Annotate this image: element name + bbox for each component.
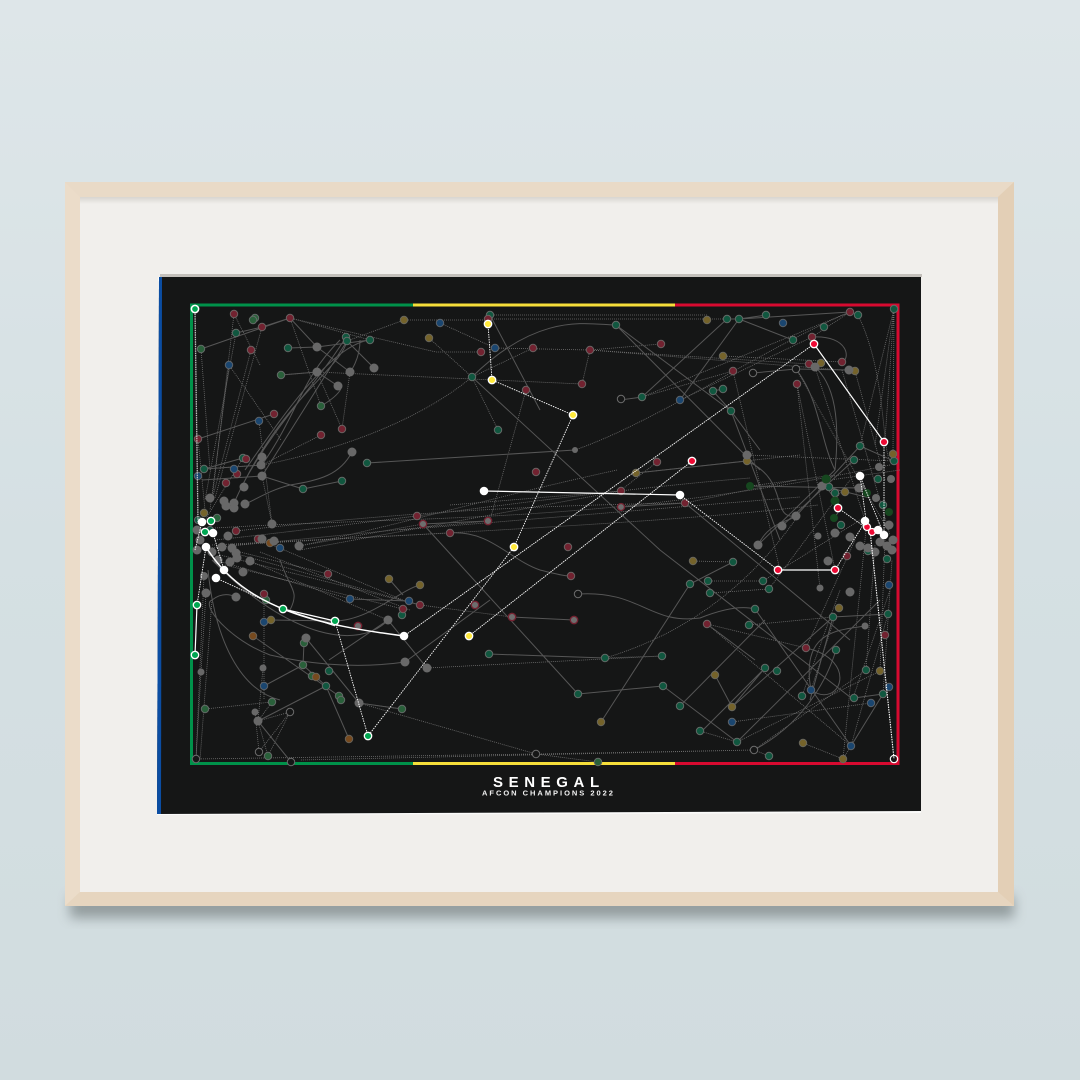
orange nodes	[249, 539, 353, 743]
wooden frame	[65, 182, 1014, 906]
dotted passes	[195, 309, 900, 762]
pass network	[191, 305, 900, 766]
red-ringed grey nodes	[354, 504, 624, 630]
white ring corner markers	[191, 305, 898, 763]
subtitle: AFCON Champions 2022: AFCON CHAMPIONS 2022	[482, 788, 615, 798]
title: SENEGAL: SENEGAL	[493, 774, 605, 791]
green nodes	[197, 314, 602, 766]
dark green faded nodes	[746, 474, 893, 522]
mat board	[80, 197, 998, 892]
red nodes	[194, 308, 889, 652]
highlighted green nodes	[191, 306, 372, 740]
grey nodes	[192, 342, 898, 726]
highlighted route lines	[195, 309, 894, 759]
highlighted yellow nodes	[465, 320, 577, 640]
highlighted red nodes	[688, 340, 888, 574]
curved and straight passes	[198, 312, 894, 762]
gold nodes	[200, 316, 897, 763]
frame shadow	[70, 896, 1014, 918]
tri-colour pitch border	[192, 305, 898, 764]
blue nodes	[194, 319, 893, 750]
hollow nodes	[192, 365, 800, 766]
highlighted white nodes	[198, 472, 888, 640]
poster	[157, 274, 922, 815]
teal nodes	[194, 305, 898, 760]
poster blue edge	[157, 277, 162, 814]
